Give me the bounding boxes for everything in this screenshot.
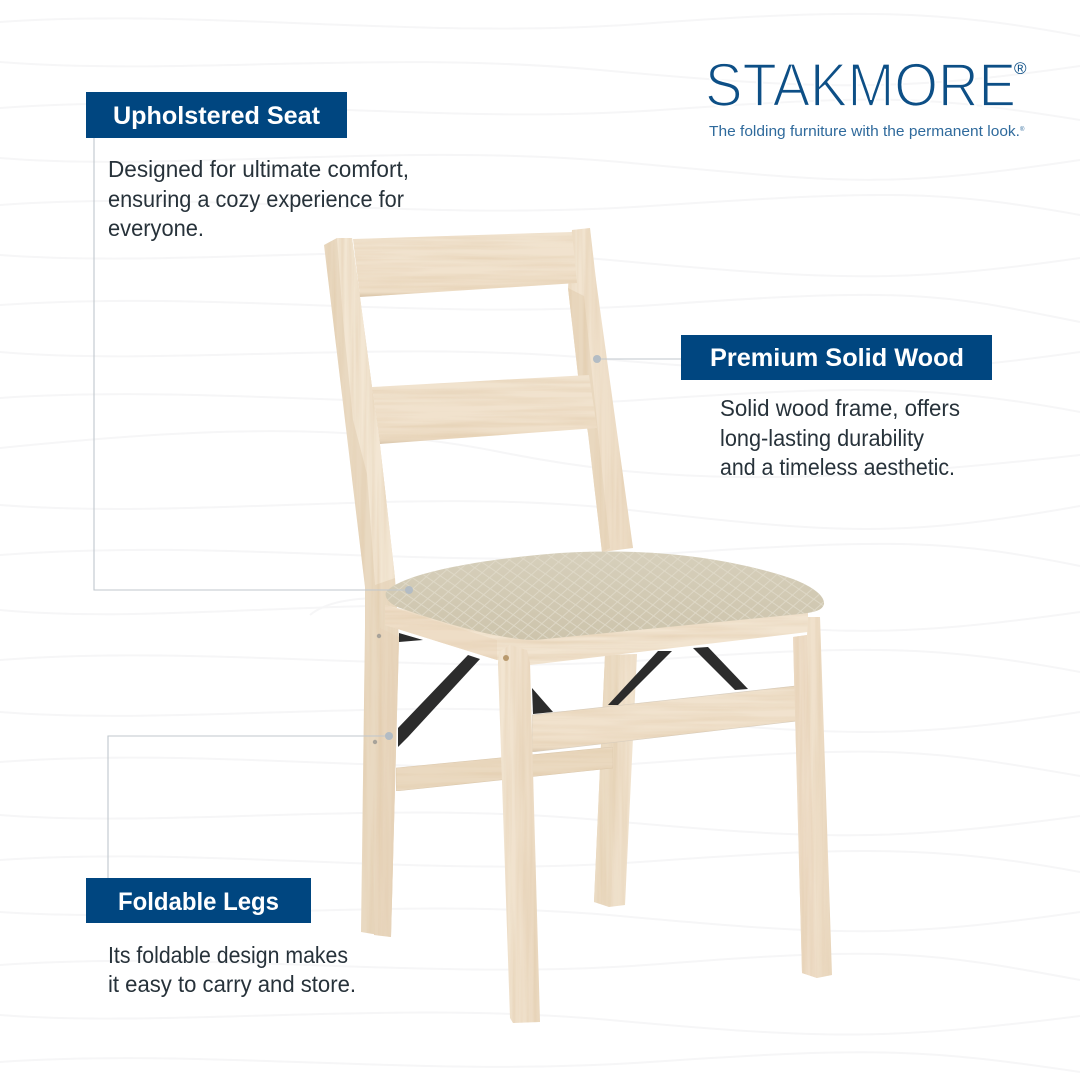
text: legs description [108,942,356,997]
folding metal brackets [398,633,748,747]
text: seat description: everyone. [108,215,204,241]
text: wood description: long-lasting durability [720,425,924,451]
text: wood description: and a timeless aesthetic. [720,454,955,480]
front cross rail [532,685,805,752]
left back post and rear left leg [324,238,399,937]
top back slat [353,232,577,297]
heading: premium solid wood: Premium Solid Wood [710,344,964,372]
brand logo: ® [1020,126,1025,133]
heading: foldable legs: Foldable Legs [118,888,279,916]
brand logo: ® [1014,59,1027,78]
leader line: wood [593,355,681,363]
text: seat description [108,156,409,241]
heading: upholstered seat: Upholstered Seat [113,102,321,130]
middle back slat [372,375,597,444]
leader line: seat [94,138,413,594]
callout: foldable legs [86,732,393,997]
text: seat description: ensuring a cozy experience for [108,186,404,212]
leader line: legs [108,732,393,878]
brand logo: STAKMORE [705,51,1016,119]
seat frame [385,605,808,665]
heading: foldable legs [86,878,311,923]
text: wood description [720,395,960,480]
callout: premium solid wood [593,335,992,480]
leg screws [373,634,381,744]
heading: upholstered seat [86,92,347,138]
text: legs description: it easy to carry and store. [108,971,356,997]
front left leg [498,645,540,1023]
rear right leg [594,654,637,907]
callout: upholstered seat [86,92,413,594]
brand logo: The folding furniture with the permanent look. [709,123,1020,140]
chair illustration [324,228,832,1023]
text: legs description: Its foldable design makes [108,942,348,968]
heading: premium solid wood [681,335,992,380]
text: seat description: Designed for ultimate comfort, [108,156,409,182]
text: wood description: Solid wood frame, offers [720,395,960,421]
right back post [568,228,633,552]
upholstered seat cushion [386,551,824,640]
front right leg [793,617,832,978]
rear stretcher rail [396,747,613,791]
